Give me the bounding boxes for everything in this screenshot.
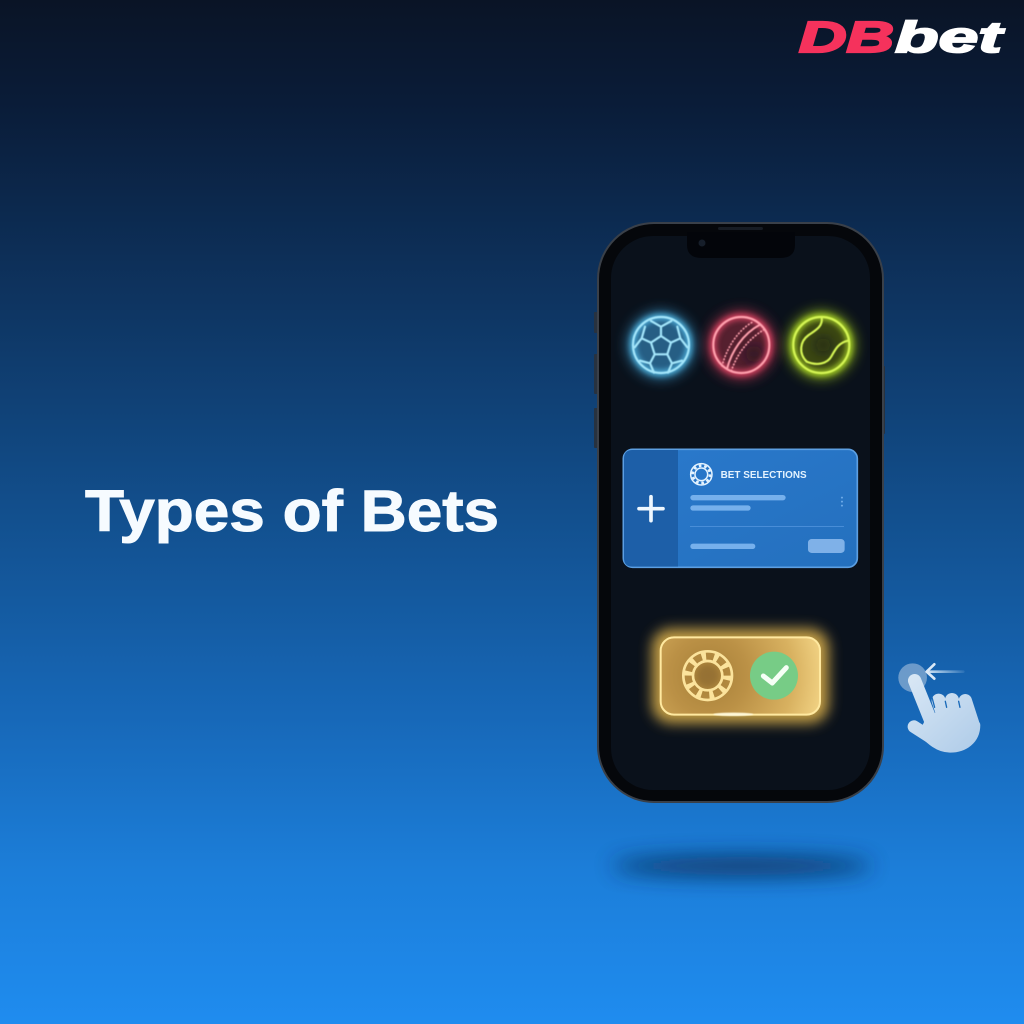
button placeholder bbox=[808, 539, 845, 553]
phone bbox=[594, 223, 885, 802]
speaker bbox=[718, 227, 763, 230]
finger grooves bbox=[932, 697, 960, 707]
logo: DBbet: bet bbox=[895, 13, 1006, 62]
icon: poker chip bbox=[683, 651, 732, 700]
title: Types of Bets bbox=[85, 479, 499, 544]
icon: cricket ball bbox=[708, 312, 775, 378]
phone screen bbox=[611, 236, 870, 790]
icon: plus bbox=[639, 497, 663, 521]
panel: bet selections card bbox=[623, 449, 857, 567]
placeholder lines bbox=[690, 495, 786, 549]
panel: gold confirmation button bbox=[652, 629, 829, 723]
heading: bet selections: BET SELECTIONS bbox=[721, 470, 807, 481]
touch ripple bbox=[898, 663, 927, 692]
card body bbox=[623, 449, 857, 567]
gold glow bbox=[652, 629, 829, 723]
icon: poker chip small bbox=[691, 464, 712, 485]
hand bbox=[914, 681, 976, 748]
icon: tapping hand with arrow bbox=[898, 663, 976, 748]
phone shadow bbox=[612, 856, 872, 876]
phone body bbox=[598, 223, 883, 802]
divider bbox=[690, 525, 844, 528]
camera bbox=[698, 240, 706, 246]
gold card bbox=[661, 637, 820, 715]
icon: soccer ball bbox=[628, 312, 694, 378]
logo: DBbet: DB bbox=[799, 13, 894, 62]
notch bbox=[687, 232, 795, 258]
logo: DBbet bbox=[799, 13, 1006, 62]
side buttons bbox=[594, 312, 885, 448]
swipe arrow bbox=[927, 664, 965, 679]
icon: green check bbox=[750, 652, 798, 700]
highlight bbox=[713, 713, 753, 716]
icon: tennis ball bbox=[788, 312, 855, 378]
menu dots bbox=[841, 497, 843, 507]
card left strip bbox=[624, 450, 678, 567]
